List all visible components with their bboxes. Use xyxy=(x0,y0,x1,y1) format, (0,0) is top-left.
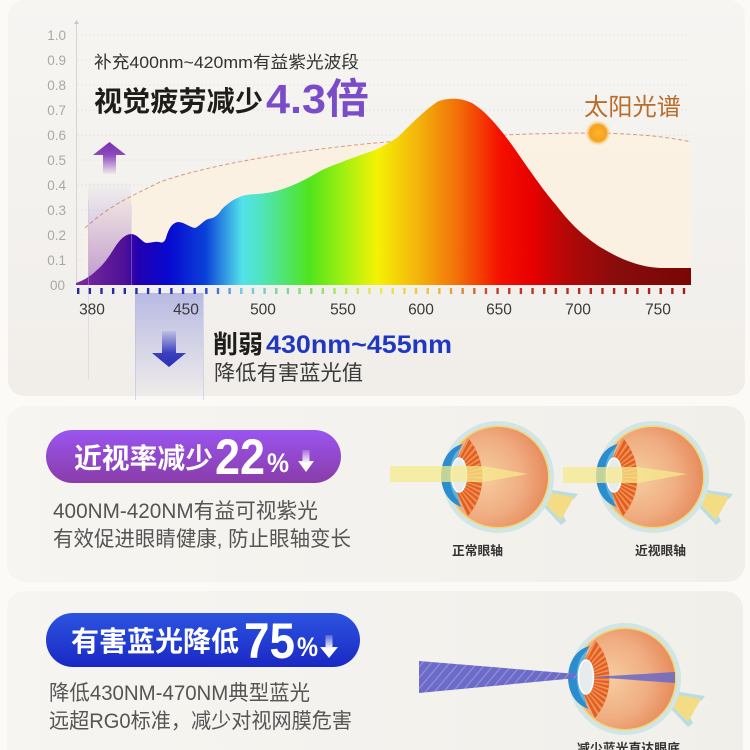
weaken description: 降低有害蓝光值 xyxy=(214,362,363,385)
x axis labels: 380 xyxy=(79,302,105,318)
blue light beam xyxy=(419,661,577,693)
subtitle text: 补充400nm~420mm有益紫光波段 xyxy=(94,53,359,72)
myopia text line 2: 有效促进眼睛健康, 防止眼轴变长 xyxy=(53,528,351,551)
panel: blue light xyxy=(7,591,743,750)
down arrow xyxy=(152,331,186,367)
y axis labels: 0.4 xyxy=(47,178,66,193)
y axis labels: 0.1 xyxy=(47,253,66,268)
solar spectrum label: 太阳光谱 xyxy=(584,94,681,121)
eye: normal axis xyxy=(390,421,578,533)
headline number 4.3: 4.3倍 xyxy=(266,76,369,122)
y axis labels: 0.2 xyxy=(47,228,66,243)
purple pill xyxy=(46,429,341,485)
normal axis label: 正常眼轴 xyxy=(452,543,503,558)
eye: reduced blue light xyxy=(551,623,705,735)
y axis labels: 0.8 xyxy=(47,78,66,93)
solar spectrum dashed curve xyxy=(85,133,691,228)
y axis labels: 00 xyxy=(50,278,65,293)
wavelength ticks xyxy=(77,288,691,294)
x axis labels: 600 xyxy=(408,302,434,318)
eye: myopic axis xyxy=(563,421,733,533)
x axis labels: 450 xyxy=(173,302,199,318)
y axis labels xyxy=(47,28,66,293)
y axis labels: 0.7 xyxy=(47,103,66,118)
chart grid xyxy=(77,35,690,260)
weaken wavelength: 430nm~455nm xyxy=(266,331,452,359)
myopia text line 1: 400NM-420NM有益可视紫光 xyxy=(53,500,318,523)
blue band lines xyxy=(136,293,204,400)
purple pill: 22 xyxy=(215,429,265,485)
blue pill: 75 xyxy=(244,613,295,669)
visible spectrum curve xyxy=(76,99,691,285)
solar spectrum area xyxy=(85,133,691,270)
blue reduced band xyxy=(135,293,203,400)
blue light text line 2: 远超RG0标准，减少对视网膜危害 xyxy=(49,710,352,733)
purple pill: 近视率减少 xyxy=(74,443,213,474)
blue pill xyxy=(46,613,360,669)
y axis xyxy=(74,20,79,285)
blue pill: 有害蓝光降低 xyxy=(71,626,239,657)
blue pill: % xyxy=(297,632,318,662)
y axis labels: 0.3 xyxy=(47,203,66,218)
y axis labels: 0.9 xyxy=(47,53,66,68)
purple band lines xyxy=(88,200,132,380)
purple pill: % xyxy=(267,448,289,478)
weaken label: 削弱 xyxy=(213,331,263,359)
x axis labels: 750 xyxy=(645,302,671,318)
y axis labels: 0.5 xyxy=(47,153,66,168)
x axis labels xyxy=(79,302,671,318)
sun icon xyxy=(585,120,611,146)
blue light text line 1: 降低430NM-470NM典型蓝光 xyxy=(49,682,310,705)
up arrow xyxy=(93,142,126,174)
purple supplemental band xyxy=(88,180,131,285)
y axis labels: 1.0 xyxy=(47,28,66,43)
x axis labels: 700 xyxy=(565,302,591,318)
panel: spectrum chart xyxy=(8,0,745,400)
myopia axis label: 近视眼轴 xyxy=(635,543,686,558)
y axis labels: 0.6 xyxy=(47,128,66,143)
x axis labels: 550 xyxy=(330,302,356,318)
x axis labels: 650 xyxy=(486,302,512,318)
x axis labels: 500 xyxy=(250,302,276,318)
headline: visual fatigue: 视觉疲劳减少 xyxy=(94,86,263,117)
panel: myopia xyxy=(7,406,745,582)
